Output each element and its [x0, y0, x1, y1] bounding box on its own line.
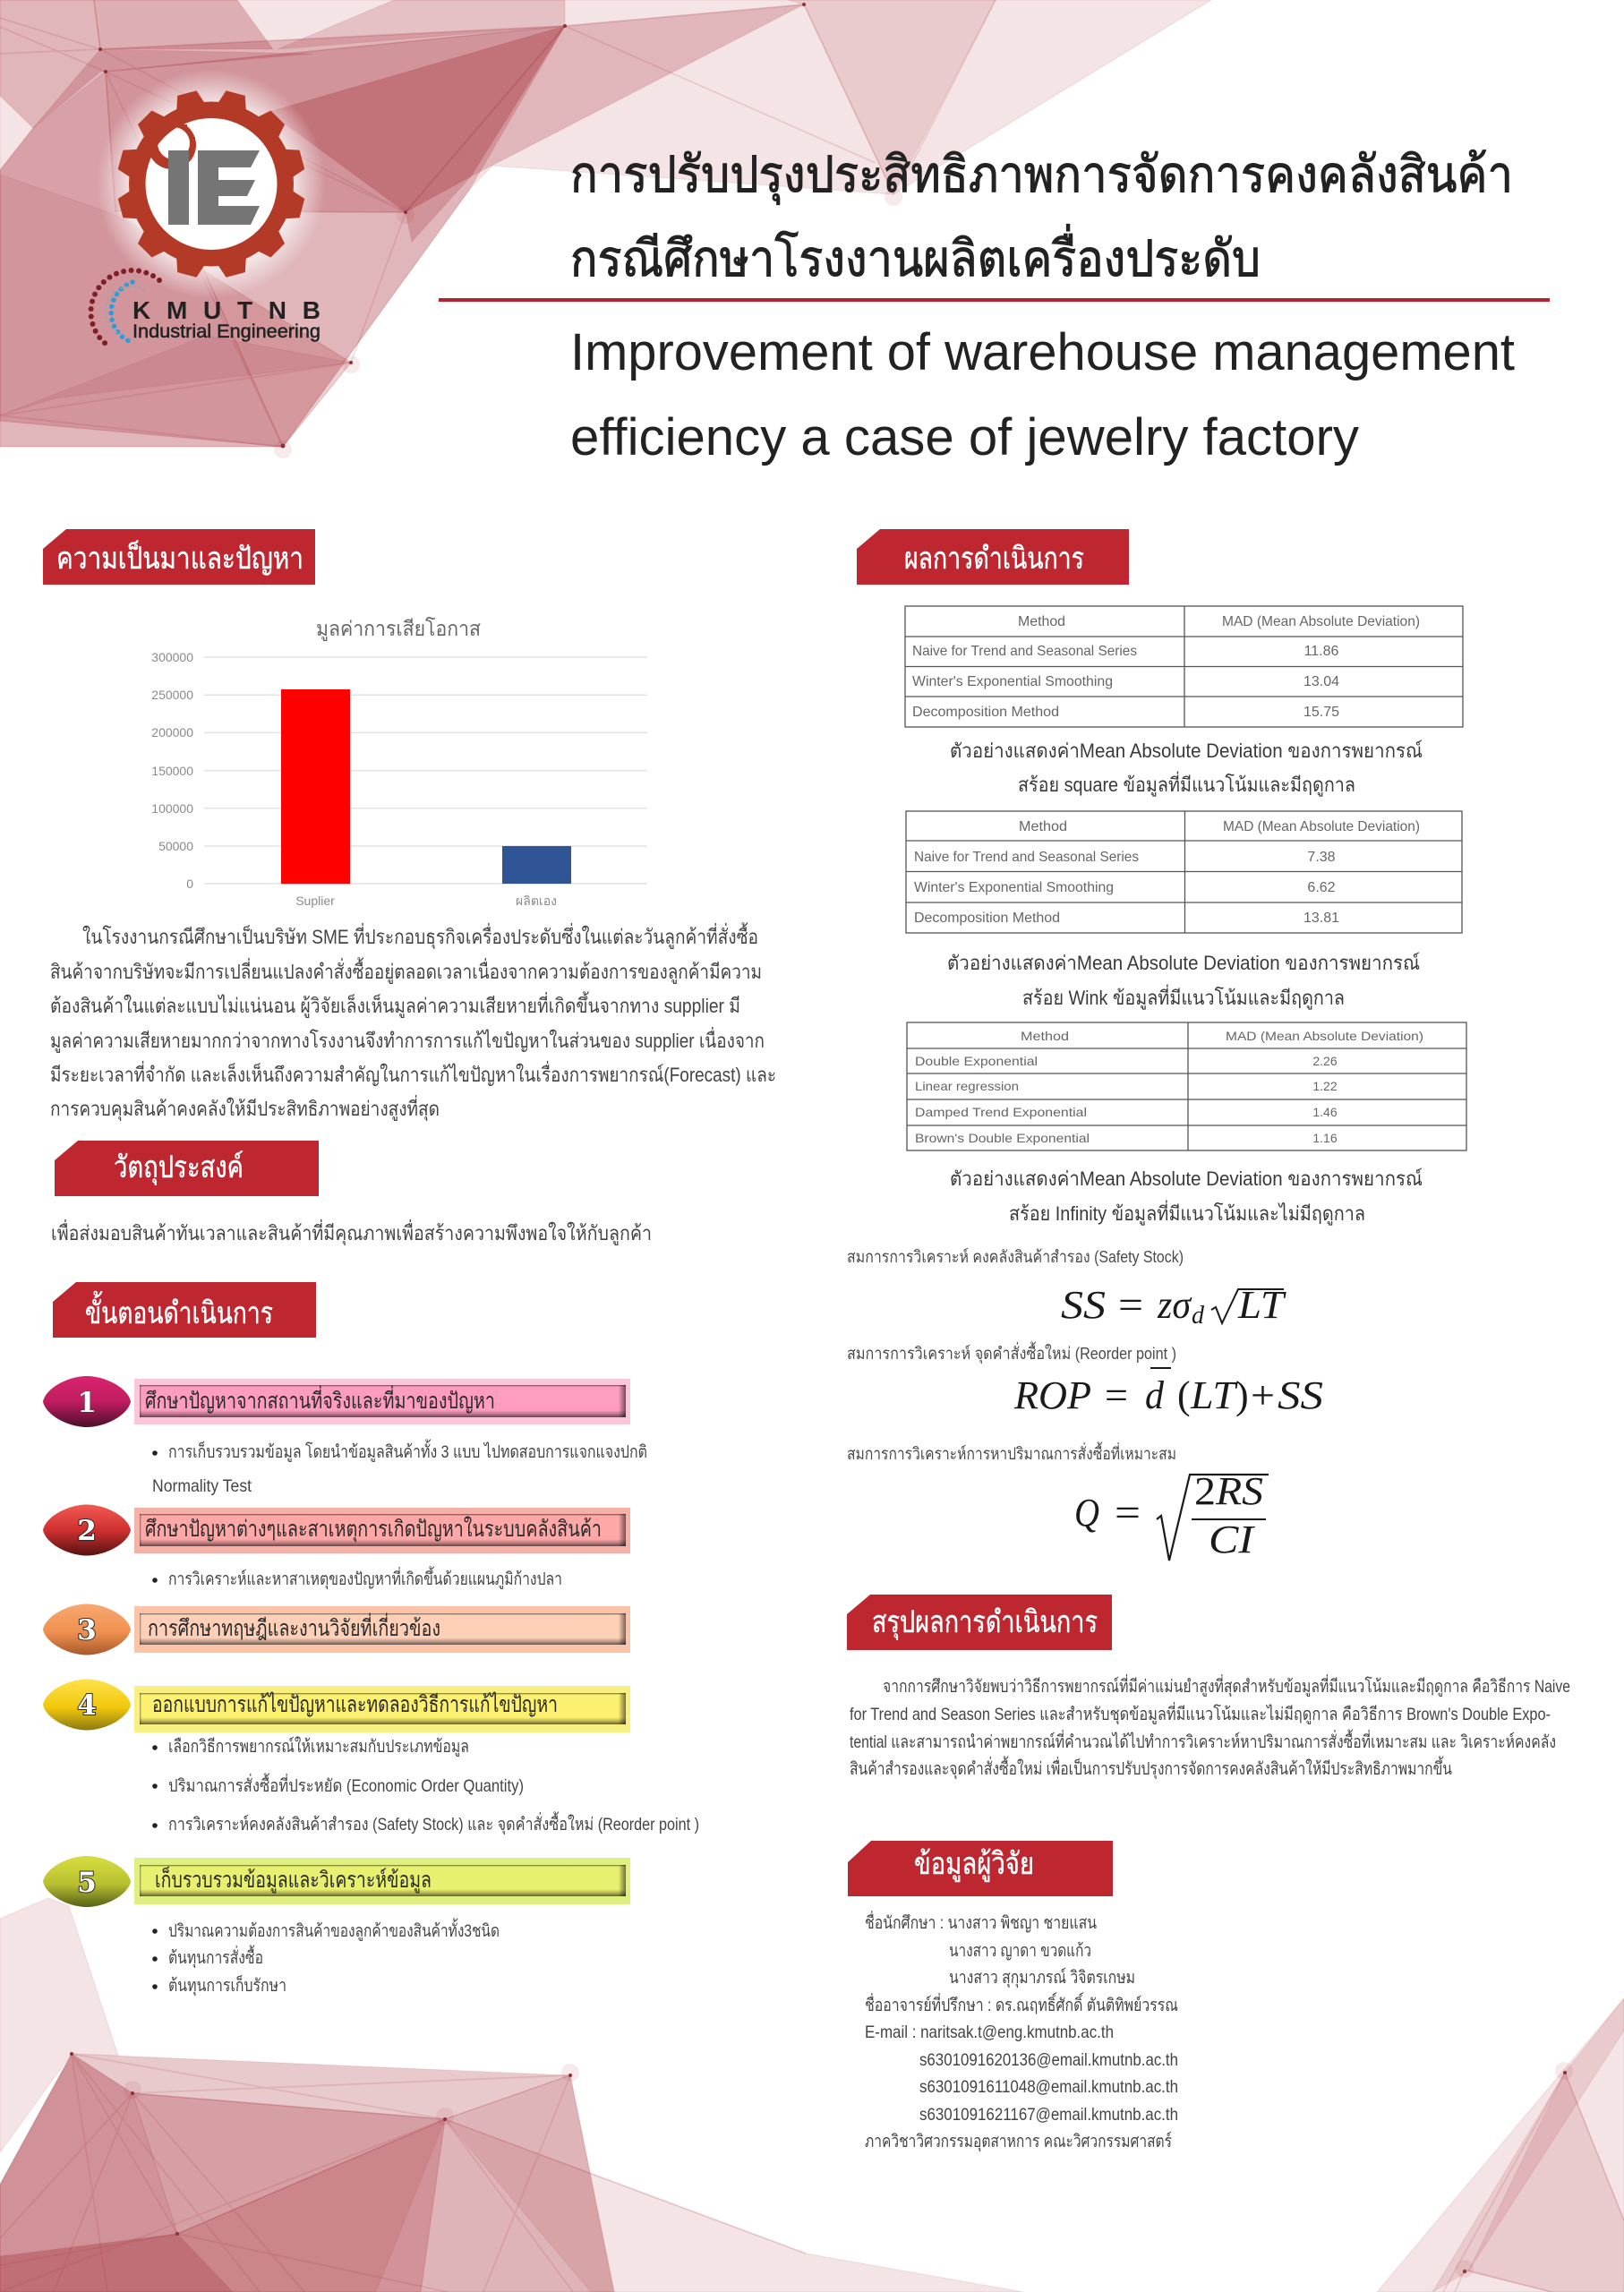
formula: ROP: LT — [1190, 1373, 1239, 1417]
step 4 bullets: การวิเคราะห์คงคลังสินค้าสำรอง (Safety Stock) และ จุดคำสั่งซื้อใหม่ (Reorder point ) — [168, 1811, 699, 1835]
heading: objective: วัตถุประสงค์ — [114, 1150, 244, 1185]
caption 2 — [947, 952, 1420, 1010]
bar chart: opportunity loss: มูลค่าการเสียโอกาส — [316, 617, 481, 641]
heading: conclusion: สรุปผลการดำเนินการ — [872, 1605, 1098, 1640]
text: researcher details: ชื่ออาจารย์ที่ปรึกษา : ดร.ณฤทธิ์ศักดิ์ ตันติทิพย์วรรณ — [865, 1992, 1178, 2015]
table 3: Linear regression — [915, 1079, 1019, 1093]
Industrial Engineering wordmark: Industrial Engineering — [132, 321, 321, 342]
text: researcher details: นางสาว ญาดา ขวดแก้ว — [949, 1941, 1091, 1961]
table 1: Decomposition Method — [912, 705, 1059, 720]
panel: conclusion — [847, 1595, 1570, 1780]
table 1: MAD (Mean Absolute Deviation) — [1222, 614, 1420, 629]
table 1: 15.75 — [1303, 705, 1339, 720]
caption 1 — [950, 740, 1423, 797]
text: researcher details: ชื่อนักศึกษา : นางสาว พิชญา ชายแสน — [865, 1911, 1097, 1933]
table 1: 13.04 — [1303, 674, 1339, 689]
step 1 — [43, 1376, 630, 1427]
table 3: 1.16 — [1312, 1131, 1338, 1145]
paragraph: conclusion — [850, 1674, 1570, 1780]
table 3: Double Exponential — [915, 1054, 1038, 1068]
formula label: safety stock: สมการการวิเคราะห์ คงคลังสินค้าสำรอง (Safety Stock) — [847, 1247, 1184, 1266]
table 1: 11.86 — [1304, 644, 1339, 659]
heading: researchers: ข้อมูลผู้วิจัย — [914, 1847, 1034, 1882]
step 5: เก็บรวบรวมข้อมูลและวิเคราะห์ข้อมูล — [155, 1866, 432, 1894]
step 4 — [43, 1680, 630, 1732]
table 2: Decomposition Method — [914, 911, 1060, 926]
table 3 — [907, 1022, 1466, 1150]
formula: ROP: ( — [1177, 1373, 1191, 1417]
English title line 1: Improvement of warehouse management — [570, 323, 1515, 381]
formula: Q: = — [1115, 1491, 1141, 1535]
text: researcher details: s6301091620136@email.kmutnb.ac.th — [919, 2050, 1178, 2070]
table 1: Method — [1018, 614, 1065, 629]
table 3: 1.22 — [1312, 1079, 1338, 1093]
paragraph: background: ในโรงงานกรณีศึกษาเป็นบริษัท SME ที่ประกอบธุรกิจเครื่องประดับซึ่งในแต่ละวันลูกค้าที่สั่งซื้อ — [82, 922, 758, 949]
table 3: MAD (Mean Absolute Deviation) — [1226, 1029, 1423, 1043]
panel: objective — [51, 1141, 652, 1245]
background: top-left polygon mesh — [0, 0, 1211, 458]
formula: ROP: = — [1105, 1373, 1128, 1417]
formula: ROP — [1013, 1367, 1323, 1417]
step 2: 2 — [77, 1515, 97, 1547]
table 1 — [905, 606, 1463, 727]
formula: ROP: SS — [1278, 1373, 1323, 1417]
bar chart: opportunity loss: Suplier — [295, 894, 335, 908]
paragraph: background — [50, 922, 776, 1121]
formula: SS: LT — [1237, 1283, 1287, 1327]
step 3: การศึกษาทฤษฎีและงานวิจัยที่เกี่ยวข้อง — [148, 1612, 440, 1641]
heading: background: ความเป็นมาและปัญหา — [56, 540, 303, 576]
logo: IE KMUTNB Industrial Engineering — [91, 70, 326, 344]
step 1 bullets: การเก็บรวบรวมข้อมูล โดยนำข้อมูลสินค้าทั้ง 3 แบบ ไปทดสอบการแจกแจงปกติ — [168, 1439, 647, 1463]
table 2: MAD (Mean Absolute Deviation) — [1223, 819, 1420, 834]
bar chart: opportunity loss: 150000 — [151, 764, 193, 778]
table 2: Method — [1019, 819, 1067, 834]
step 4 bullets: ปริมาณการสั่งซื้อที่ประหยัด (Economic Order Quantity) — [168, 1773, 524, 1796]
formula: Q: Q — [1074, 1491, 1099, 1535]
formula: SS: zσ — [1157, 1283, 1192, 1327]
Thai title line 1: การปรับปรุงประสิทธิภาพการจัดการคงคลังสินค้า — [570, 146, 1513, 205]
step 5: 5 — [77, 1867, 97, 1899]
panel: researcher information — [848, 1841, 1178, 2152]
panel: results — [847, 529, 1466, 1561]
formula label: reorder point: สมการการวิเคราะห์ จุดคำสั่งซื้อใหม่ (Reorder point ) — [847, 1341, 1176, 1364]
table 2 — [906, 811, 1462, 933]
bar chart: opportunity loss: 100000 — [151, 801, 193, 816]
table 3: 2.26 — [1312, 1054, 1338, 1068]
step 2 — [43, 1504, 630, 1556]
icon: dotted arcs — [91, 270, 159, 344]
background: bottom-right polygon mesh — [1377, 1998, 1624, 2292]
paragraph: conclusion: สินค้าสำรองและจุดคำสั่งซื้อใหม่ เพื่อเป็นการปรับปรุงการจัดการคงคลังสินค้าให้มีประสิทธิภาพมากขึ้น — [850, 1756, 1452, 1780]
step 1 bullets — [152, 1439, 647, 1496]
formula label: EOQ: สมการการวิเคราะห์การหาปริมาณการสั่งซื้อที่เหมาะสม — [847, 1441, 1176, 1463]
heading: objective — [55, 1141, 319, 1196]
step 4 bullets: เลือกวิธีการพยากรณ์ให้เหมาะสมกับประเภทข้อมูล — [168, 1736, 469, 1757]
bar chart: opportunity loss: 200000 — [151, 725, 193, 740]
heading: researchers — [848, 1841, 1113, 1896]
step 2: ศึกษาปัญหาต่างๆและสาเหตุการเกิดปัญหาในระบบคลังสินค้า — [145, 1516, 602, 1543]
background: bottom-left polygon mesh — [0, 1898, 1023, 2292]
caption 3: สร้อย Infinity ข้อมูลที่มีแนวโน้มและไม่มีฤดูกาล — [1009, 1200, 1365, 1226]
text: researcher details: นางสาว สุกุมาภรณ์ วิจิตรเกษม — [949, 1967, 1135, 1988]
text: researcher details: s6301091611048@email.kmutnb.ac.th — [919, 2077, 1178, 2097]
step 1: 1 — [77, 1387, 97, 1419]
bar chart: opportunity loss: 250000 — [151, 688, 193, 702]
formula: SS: = — [1118, 1283, 1143, 1327]
paragraph: background: มูลค่าความเสียหายมากกว่าจากทางโรงงานจึงทำการการแก้ไขปัญหาในส่วนของ supplier เนื่องจาก — [50, 1026, 765, 1053]
step 4: 4 — [77, 1689, 97, 1722]
paragraph: background: มีระยะเวลาที่จำกัด และเล็งเห็นถึงความสำคัญในการแก้ไขปัญหาในเรื่องการพยากรณ์(Forecast) และ — [50, 1060, 776, 1086]
icon: IE letters — [168, 150, 260, 225]
formula: SS — [1061, 1283, 1287, 1330]
text: researcher details — [865, 1911, 1178, 2152]
step 1: ศึกษาปัญหาจากสถานที่จริงและที่มาของปัญหา — [145, 1385, 495, 1414]
title block — [439, 146, 1550, 466]
panel: procedure steps — [43, 1282, 699, 1997]
step 5 — [43, 1856, 630, 1907]
heading: results — [857, 529, 1129, 585]
table 3: 1.46 — [1312, 1105, 1338, 1119]
step 5 bullets: ต้นทุนการเก็บรักษา — [168, 1974, 286, 1997]
caption 2: สร้อย Wink ข้อมูลที่มีแนวโน้มและมีฤดูกาล — [1022, 984, 1345, 1010]
caption 1: ตัวอย่างแสดงค่าMean Absolute Deviation ของการพยากรณ์ — [950, 740, 1423, 762]
text: objective: เพื่อส่งมอบสินค้าทันเวลาและสินค้าที่มีคุณภาพเพื่อสร้างความพึงพอใจให้กับลูกค้า — [51, 1219, 652, 1245]
formula: Q — [1074, 1469, 1269, 1561]
caption 3: ตัวอย่างแสดงค่าMean Absolute Deviation ของการพยากรณ์ — [950, 1167, 1423, 1190]
Thai title line 2: กรณีศึกษาโรงงานผลิตเครื่องประดับ — [570, 224, 1261, 286]
bar chart: opportunity loss: ผลิตเอง — [516, 894, 557, 908]
table 3: Brown's Double Exponential — [915, 1131, 1090, 1145]
step 5 bullets — [152, 1918, 500, 1997]
table 3: Method — [1021, 1029, 1069, 1043]
step 4 bullets — [152, 1736, 699, 1835]
table 2: 6.62 — [1307, 880, 1336, 895]
formula: SS: SS — [1061, 1283, 1106, 1327]
bar chart: opportunity loss: 0 — [186, 877, 193, 891]
heading: procedure — [53, 1282, 316, 1338]
table 2: 7.38 — [1307, 850, 1336, 865]
step 5 bullets: ปริมาณความต้องการสินค้าของลูกค้าของสินค้าทั้ง3ชนิด — [168, 1918, 500, 1942]
heading: results: ผลการดำเนินการ — [904, 542, 1084, 576]
step 3: 3 — [77, 1614, 97, 1646]
English title line 2: efficiency a case of jewelry factory — [570, 408, 1359, 466]
bar chart: opportunity loss — [151, 617, 647, 908]
text: researcher details: s6301091621167@email.kmutnb.ac.th — [919, 2105, 1178, 2125]
table 2: 13.81 — [1303, 911, 1339, 926]
step 4: ออกแบบการแก้ไขปัญหาและทดลองวิธีการแก้ไขปัญหา — [152, 1691, 558, 1717]
formula: Q: 2 — [1194, 1469, 1216, 1513]
formula: ROP: + — [1251, 1373, 1275, 1417]
formula: SS: d — [1192, 1302, 1205, 1330]
formula: Q: CI — [1209, 1518, 1256, 1561]
KMUTNB wordmark: KMUTNB — [132, 296, 321, 324]
caption 3 — [950, 1167, 1423, 1226]
bar chart: opportunity loss: 50000 — [158, 839, 193, 853]
table 2: Winter's Exponential Smoothing — [914, 880, 1114, 895]
caption 1: สร้อย square ข้อมูลที่มีแนวโน้มและมีฤดูกาล — [1018, 771, 1355, 797]
table 1: Naive for Trend and Seasonal Series — [912, 644, 1137, 659]
step 3 — [43, 1604, 630, 1655]
step 2 bullet: การวิเคราะห์และหาสาเหตุของปัญหาที่เกิดขึ้นด้วยแผนภูมิก้างปลา — [168, 1566, 562, 1590]
heading: procedure: ขั้นตอนดำเนินการ — [85, 1291, 273, 1330]
formula: ROP: ) — [1235, 1373, 1249, 1417]
paragraph: background: ต้องสินค้าในแต่ละแบบไม่แน่นอน ผู้วิจัยเล็งเห็นมูลค่าความเสียหายที่เกิดขึ้นจากทาง supplier มี — [50, 991, 740, 1018]
paragraph: background: สินค้าจากบริษัทจะมีการเปลี่ยนแปลงคำสั่งซื้ออยู่ตลอดเวลาเนื่องจากความต้องการของลูกค้ามีความ — [50, 957, 762, 984]
formula: Q: RS — [1215, 1469, 1263, 1513]
panel: background and problem — [43, 529, 776, 1121]
formula: ROP: d — [1145, 1373, 1165, 1417]
step 1 bullets: Normality Test — [152, 1476, 252, 1496]
text: researcher details: ภาควิชาวิศวกรรมอุตสาหการ คณะวิศวกรรมศาสตร์ — [865, 2131, 1172, 2152]
heading: conclusion — [847, 1595, 1112, 1650]
table 3: Damped Trend Exponential — [915, 1105, 1087, 1119]
title rule — [439, 298, 1550, 302]
step 5 bullets: ต้นทุนการสั่งซื้อ — [168, 1945, 263, 1969]
table 2: Naive for Trend and Seasonal Series — [914, 850, 1139, 865]
paragraph: background: การควบคุมสินค้าคงคลังให้มีประสิทธิภาพอย่างสูงที่สุด — [50, 1094, 440, 1121]
caption 2: ตัวอย่างแสดงค่าMean Absolute Deviation ของการพยากรณ์ — [947, 952, 1420, 974]
icon: gear — [116, 90, 306, 278]
heading: background — [43, 529, 315, 585]
formula: ROP: ROP — [1013, 1373, 1091, 1417]
table 1: Winter's Exponential Smoothing — [912, 674, 1113, 689]
step 2 bullet — [152, 1566, 562, 1590]
bar chart: opportunity loss: 300000 — [151, 650, 193, 664]
text: researcher details: E-mail : naritsak.t@eng.kmutnb.ac.th — [865, 2023, 1114, 2042]
